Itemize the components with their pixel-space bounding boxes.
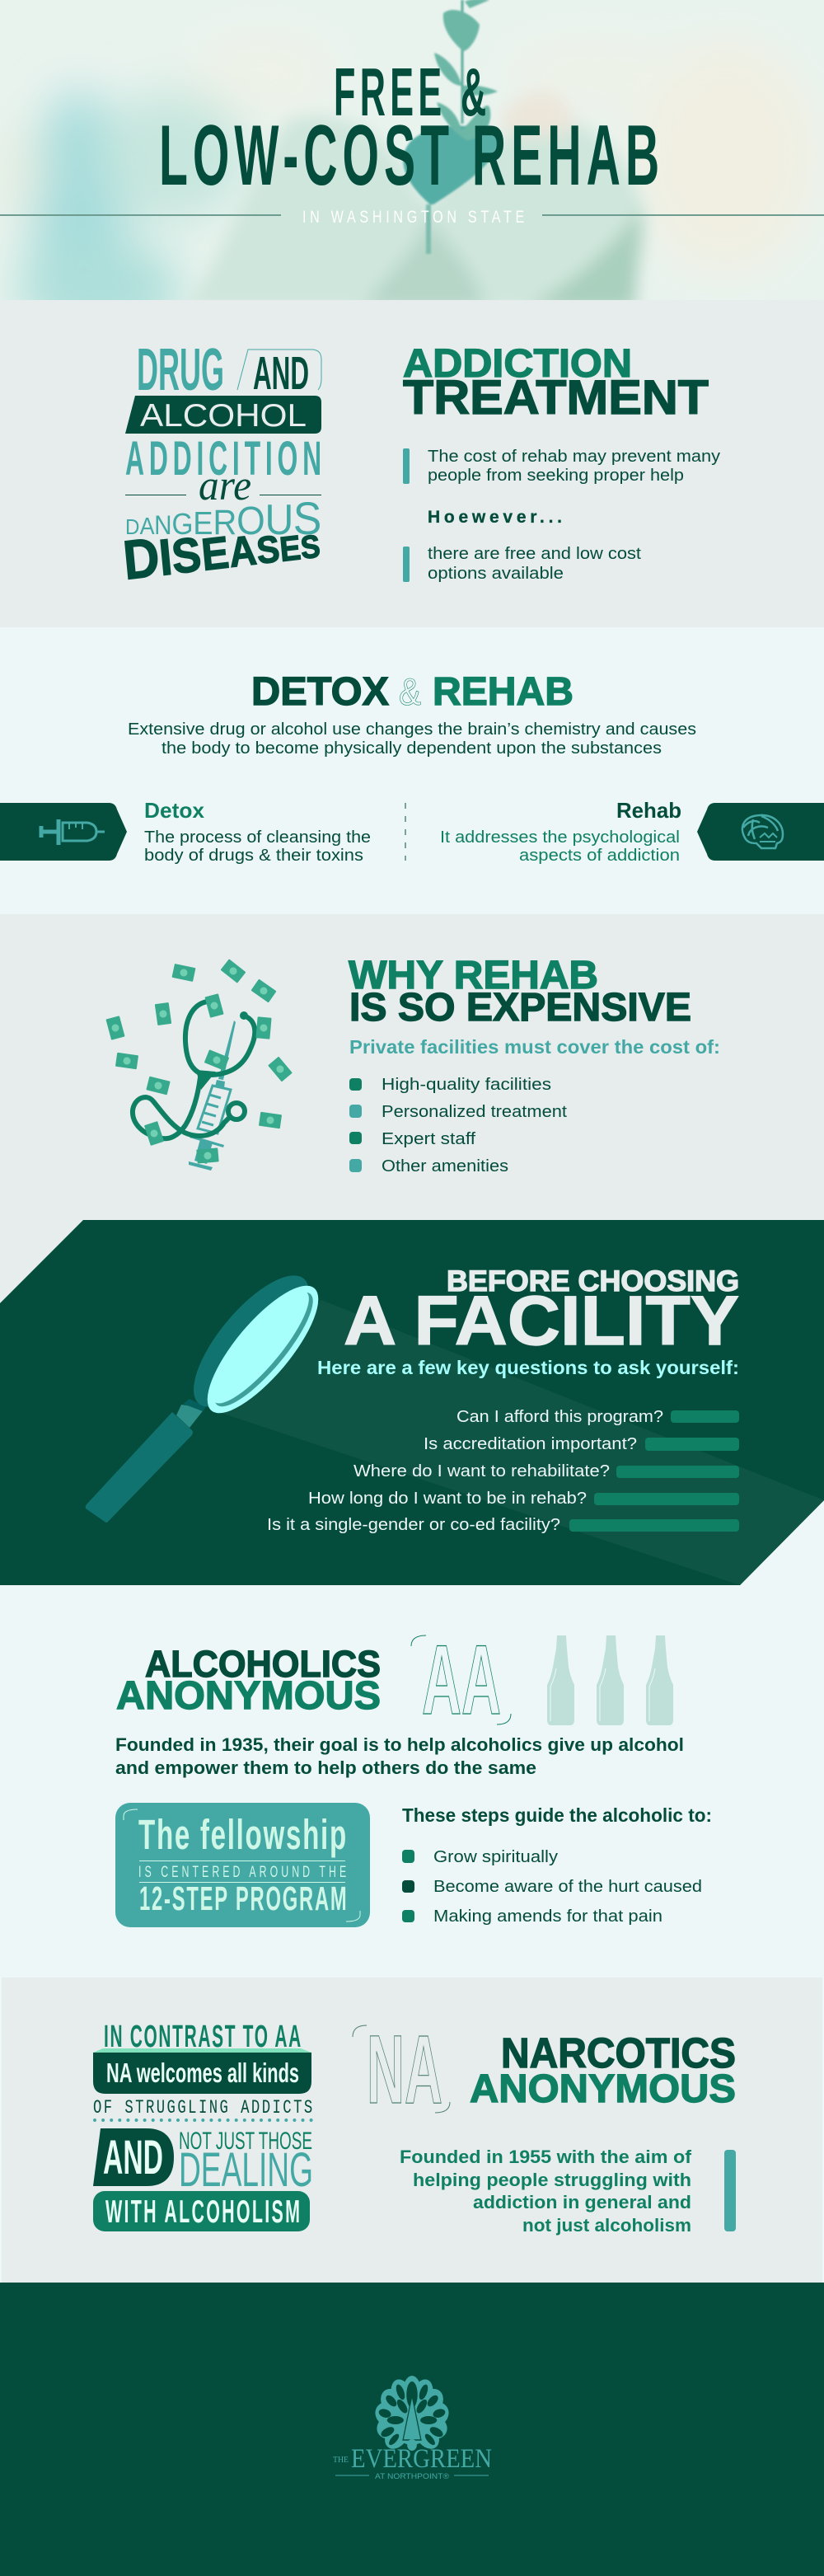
typographic poster: drug and alcohol addiction are dangerous diseases: S — [169, 527, 204, 584]
typographic poster: in contrast to AA: WITH ALCOHOLISM — [105, 2194, 300, 2230]
icon: bottles — [547, 1635, 673, 1725]
tag: rehab with brain icon — [697, 803, 824, 861]
text block: cost of rehab: people from seeking proper help — [428, 467, 684, 485]
typographic poster: drug and alcohol addiction are dangerous diseases — [120, 337, 321, 592]
list: questions with bars: Can I afford this program? — [456, 1408, 663, 1426]
subheading: these steps: These steps guide the alcoholic to: — [402, 1804, 712, 1826]
text block: founded in 1955: not just alcoholism — [522, 2215, 691, 2236]
typographic poster: in contrast to AA: NOT JUST THOSE — [179, 2128, 312, 2155]
heading: detox and rehab: DETOX — [251, 670, 389, 714]
typographic poster: in contrast to AA: AND — [103, 2131, 163, 2184]
typographic poster: drug and alcohol addiction are dangerous diseases: are — [199, 462, 251, 509]
typographic poster: drug and alcohol addiction are dangerous diseases: ADDICITION — [125, 432, 321, 485]
typographic poster: drug and alcohol addiction are dangerous diseases: DRUG — [137, 337, 224, 403]
stethoscope — [133, 1002, 255, 1138]
typographic poster: drug and alcohol addiction are dangerous diseases: S — [299, 528, 321, 565]
panel: alcoholics anonymous — [0, 1585, 824, 1978]
typographic poster: in contrast to AA: IN CONTRAST TO AA — [104, 2020, 301, 2054]
text block: founded in 1955: helping people struggling with — [413, 2170, 691, 2190]
text block: cost of rehab — [403, 448, 720, 485]
panel: narcotics anonymous — [0, 1978, 824, 2283]
heading: narcotics anonymous: ANONYMOUS — [470, 2067, 736, 2111]
text block: founded in 1955: addiction in general and — [473, 2192, 691, 2212]
light beam — [216, 1300, 824, 1585]
typographic poster: in contrast to AA: DEALING — [179, 2143, 313, 2197]
typographic poster: drug and alcohol addiction are dangerous diseases: E — [193, 505, 213, 541]
text block: free and low cost options: there are free and low cost — [428, 545, 641, 563]
list: questions with bars: Is it a single-gender or co-ed facility? — [267, 1516, 560, 1534]
subheading: key questions: Here are a few key questions to ask yourself: — [317, 1357, 739, 1378]
list: cost items: High-quality facilities — [382, 1076, 551, 1094]
typographic poster: drug and alcohol addiction are dangerous diseases: A — [227, 527, 259, 576]
heading: narcotics anonymous — [470, 2029, 736, 2111]
outline letters: NA — [353, 2015, 450, 2124]
list: cost items — [349, 1076, 567, 1175]
panel: why rehab is so expensive — [0, 914, 824, 1221]
panel: footer — [0, 2283, 824, 2576]
heading: detox and rehab: & — [399, 670, 421, 713]
heading: alcoholics anonymous: ANONYMOUS — [116, 1674, 381, 1718]
text block: detox: The process of cleansing the — [144, 828, 371, 847]
heading: why rehab is so expensive: WHY REHAB — [349, 954, 598, 997]
list: questions with bars — [267, 1408, 739, 1534]
typographic poster: drug and alcohol addiction are dangerous diseases: R — [213, 502, 236, 542]
text block: founded in 1935: Founded in 1935, their goal is to help alcoholics give up alcohol — [115, 1734, 684, 1755]
heading: before choosing a facility: BEFORE CHOOSING — [447, 1265, 739, 1297]
hero photo background — [2, 62, 798, 300]
typographic poster: in contrast to AA: NA welcomes all kinds — [106, 2058, 299, 2088]
typographic poster: in contrast to AA: OF STRUGGLING ADDICTS — [93, 2098, 312, 2119]
list: questions with bars: Is accreditation important? — [424, 1435, 637, 1453]
title: free and low-cost rehab — [159, 54, 659, 203]
list: steps — [402, 1848, 702, 1926]
typographic poster: drug and alcohol addiction are dangerous diseases: O — [236, 498, 265, 542]
heading: before choosing a facility: A FACILITY — [344, 1282, 739, 1359]
typographic poster: drug and alcohol addiction are dangerous diseases: G — [171, 509, 193, 541]
typographic poster: drug and alcohol addiction are dangerous diseases: A — [140, 513, 155, 539]
outline letters: NA: NA — [367, 2015, 442, 2124]
heading: why rehab is so expensive — [349, 954, 691, 1030]
typographic poster: drug and alcohol addiction are dangerous diseases: N — [154, 510, 172, 540]
panel: before choosing a facility — [0, 1220, 824, 1585]
typographic poster: drug and alcohol addiction are dangerous diseases: U — [265, 495, 293, 543]
text block: detox — [144, 798, 371, 865]
list: steps: Become aware of the hurt caused — [433, 1878, 702, 1896]
list: cost items: Expert staff — [382, 1130, 475, 1148]
logo: the evergreen at northpoint: THE — [333, 2456, 349, 2465]
title line 1: FREE & — [334, 54, 486, 131]
subheading: private facilities: Private facilities must cover the cost of: — [349, 1036, 720, 1058]
typographic poster: drug and alcohol addiction are dangerous diseases: ALCOHOL — [140, 398, 307, 434]
logo: the evergreen at northpoint — [333, 2375, 492, 2480]
text block: intro: Extensive drug or alcohol use changes the brain’s chemistry and causes — [128, 720, 696, 739]
text block: founded in 1935 — [115, 1734, 684, 1778]
text block: intro — [128, 720, 696, 758]
panel: addiction treatment — [0, 300, 824, 627]
typographic poster: drug and alcohol addiction are dangerous diseases: E — [199, 528, 232, 581]
illustration: stethoscope, syringe and money — [105, 959, 293, 1171]
list: cost items: Other amenities — [382, 1157, 508, 1175]
list: questions with bars: How long do I want to be in rehab? — [308, 1490, 587, 1508]
list: steps: Making amends for that pain — [433, 1907, 662, 1926]
logo: the evergreen at northpoint: EVERGREEN — [351, 2444, 492, 2474]
text block: detox: body of drugs & their toxins — [144, 847, 363, 865]
text: however: Hoewever... — [428, 508, 562, 527]
typographic poster: drug and alcohol addiction are dangerous diseases: AND — [253, 347, 309, 400]
heading: addiction treatment — [403, 342, 709, 425]
syringe — [189, 1021, 236, 1171]
icon: eucalyptus plant — [434, 0, 498, 140]
callout: fellowship 12-step program — [115, 1803, 370, 1927]
text block: rehab — [440, 798, 681, 865]
typographic poster: drug and alcohol addiction are dangerous diseases: S — [255, 528, 282, 572]
text block: free and low cost options: options available — [428, 565, 564, 583]
outline letters: AA: AA — [422, 1625, 501, 1735]
heading: detox and rehab: REHAB — [433, 670, 574, 714]
panel: detox and rehab — [0, 627, 824, 914]
text block: cost of rehab: The cost of rehab may prevent many — [428, 448, 720, 466]
tag: detox with syringe icon — [0, 803, 127, 861]
typographic poster: drug and alcohol addiction are dangerous diseases: D — [120, 525, 162, 592]
title line 2: LOW-COST REHAB — [159, 107, 659, 203]
typographic poster: in contrast to AA — [93, 2020, 313, 2231]
icon: peacock emblem — [373, 2375, 451, 2455]
text block: founded in 1935: and empower them to help others do the same — [115, 1757, 536, 1778]
typographic poster: drug and alcohol addiction are dangerous diseases: D — [125, 515, 139, 539]
typographic poster: drug and alcohol addiction are dangerous diseases: I — [157, 529, 175, 587]
money bills — [105, 959, 293, 1164]
heading: addiction treatment: ADDICTION — [403, 342, 632, 386]
text block: founded in 1955 — [400, 2147, 692, 2236]
heading: alcoholics anonymous — [116, 1643, 381, 1718]
list: questions with bars: Where do I want to rehabilitate? — [353, 1462, 610, 1480]
list: steps: Grow spiritually — [433, 1848, 558, 1866]
text block: rehab: Rehab — [616, 798, 681, 823]
text block: free and low cost options — [403, 545, 641, 583]
heading: alcoholics anonymous: ALCOHOLICS — [145, 1643, 381, 1685]
list: cost items: Personalized treatment — [382, 1103, 567, 1121]
icon: syringe — [40, 819, 105, 845]
text block: rehab: It addresses the psychological — [440, 828, 680, 847]
subtitle: in washington state: IN WASHINGTON STATE — [302, 208, 524, 228]
accent bar — [724, 2150, 736, 2231]
callout: fellowship 12-step program: 12-STEP PROGRAM — [139, 1881, 347, 1918]
outline letters: AA — [411, 1625, 511, 1735]
callout: fellowship 12-step program: IS CENTERED AROUND THE — [138, 1863, 346, 1881]
icon: brain — [742, 815, 783, 848]
text block: detox: Detox — [144, 798, 205, 823]
logo: the evergreen at northpoint: AT NORTHPOINT® — [375, 2472, 449, 2480]
icon: magnifying glass — [86, 1259, 335, 1523]
panel: hero — [2, 0, 798, 300]
heading: detox and rehab — [251, 670, 574, 714]
text block: intro: the body to become physically dependent upon the substances — [162, 739, 662, 758]
text block: rehab: aspects of addiction — [519, 847, 680, 865]
typographic poster: drug and alcohol addiction are dangerous diseases: S — [293, 493, 321, 544]
heading: addiction treatment: TREATMENT — [403, 371, 709, 425]
text block: founded in 1955: Founded in 1955 with the aim of — [400, 2147, 692, 2167]
heading: why rehab is so expensive: IS SO EXPENSIVE — [349, 986, 691, 1030]
typographic poster: drug and alcohol addiction are dangerous diseases: E — [279, 528, 302, 569]
callout: fellowship 12-step program: The fellowship — [138, 1812, 346, 1859]
heading: narcotics anonymous: NARCOTICS — [501, 2029, 736, 2076]
